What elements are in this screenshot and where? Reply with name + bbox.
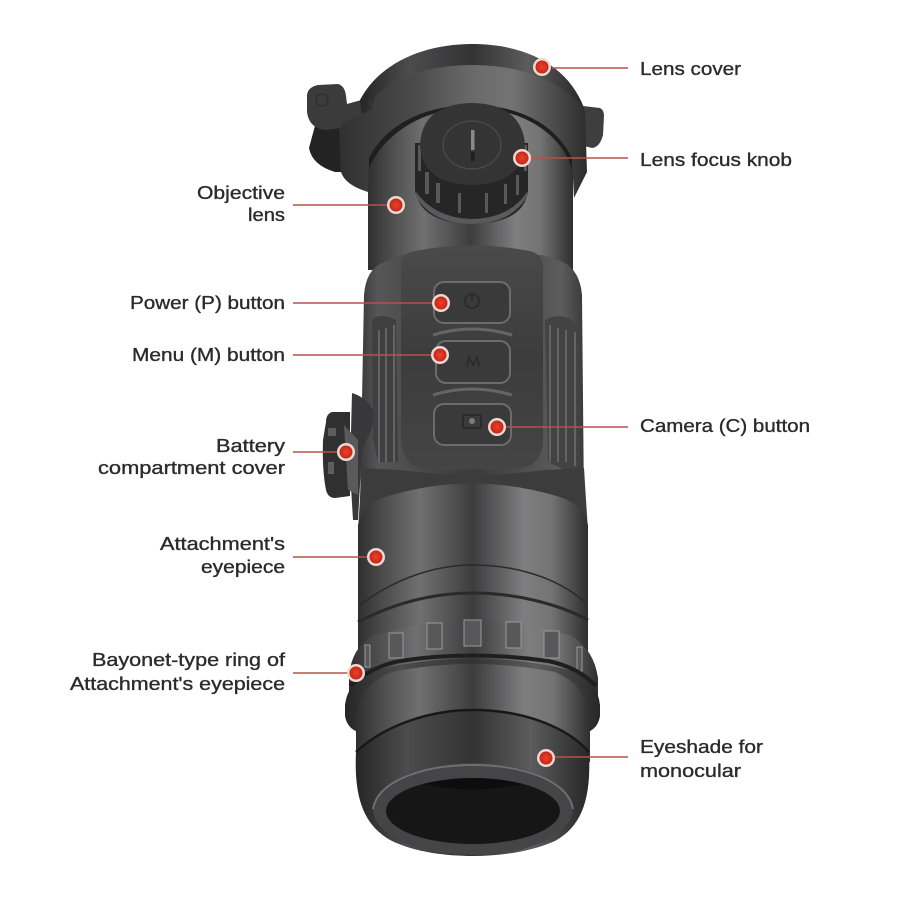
monocular device: [307, 44, 604, 856]
callout: menu button: [132, 344, 449, 365]
menu button: [436, 341, 510, 383]
focus knob: [415, 103, 528, 224]
attachment eyepiece barrel: [358, 484, 588, 665]
objective tube: [368, 100, 573, 270]
callout: lens focus knob: Lens focus knob: [640, 149, 792, 170]
callout: bayonet-type ring: [70, 649, 365, 694]
callout: objective lens: Objective: [197, 182, 285, 203]
eyeshade opening: [386, 778, 560, 844]
knob teeth: [418, 145, 527, 213]
callout: eyeshade for monocular: [537, 736, 763, 781]
button separator: [433, 389, 512, 395]
callout: eyeshade for monocular: Eyeshade for: [640, 736, 763, 757]
callout: camera button: [488, 415, 810, 436]
callout: menu button: Menu (M) button: [132, 344, 285, 365]
ring notches: [365, 620, 582, 671]
camera button: [434, 404, 511, 445]
callout: attachment's eyepiece: Attachment's: [160, 533, 285, 554]
lower collar: [358, 468, 588, 530]
button panel: [401, 246, 543, 470]
callout: bayonet-type ring: Bayonet-type ring of: [92, 649, 286, 670]
shadow under lens cover: [369, 105, 572, 168]
callout: power button: [130, 292, 450, 313]
eyepiece neck: [356, 664, 590, 762]
eyeshade: [356, 710, 589, 856]
callout: lens focus knob: [513, 149, 792, 170]
lens cover latch tab: [307, 84, 604, 172]
callout: attachment's eyepiece: eyepiece: [201, 556, 285, 577]
callout: lens cover: [533, 58, 741, 79]
callout: attachment's eyepiece: [160, 533, 385, 577]
callout: objective lens: [197, 182, 405, 225]
callout: battery compartment cover: compartment cover: [98, 457, 285, 478]
button separator: [433, 329, 512, 335]
callout: battery compartment cover: Battery: [216, 435, 286, 456]
power button: [434, 282, 510, 323]
bayonet ring: [345, 620, 600, 732]
callout: lens cover: Lens cover: [640, 58, 741, 79]
callout: eyeshade for monocular: monocular: [640, 760, 741, 781]
callout: objective lens: lens: [248, 204, 285, 225]
side grips: [360, 255, 584, 505]
callout: bayonet-type ring: Attachment's eyepiece: [70, 673, 285, 694]
callout: camera button: Camera (C) button: [640, 415, 810, 436]
lens cover rim: [360, 44, 584, 140]
callout: battery compartment cover: [98, 435, 355, 478]
callout: power button: Power (P) button: [130, 292, 285, 313]
battery compartment cover: [323, 393, 374, 520]
lens cover front band: [339, 65, 587, 198]
